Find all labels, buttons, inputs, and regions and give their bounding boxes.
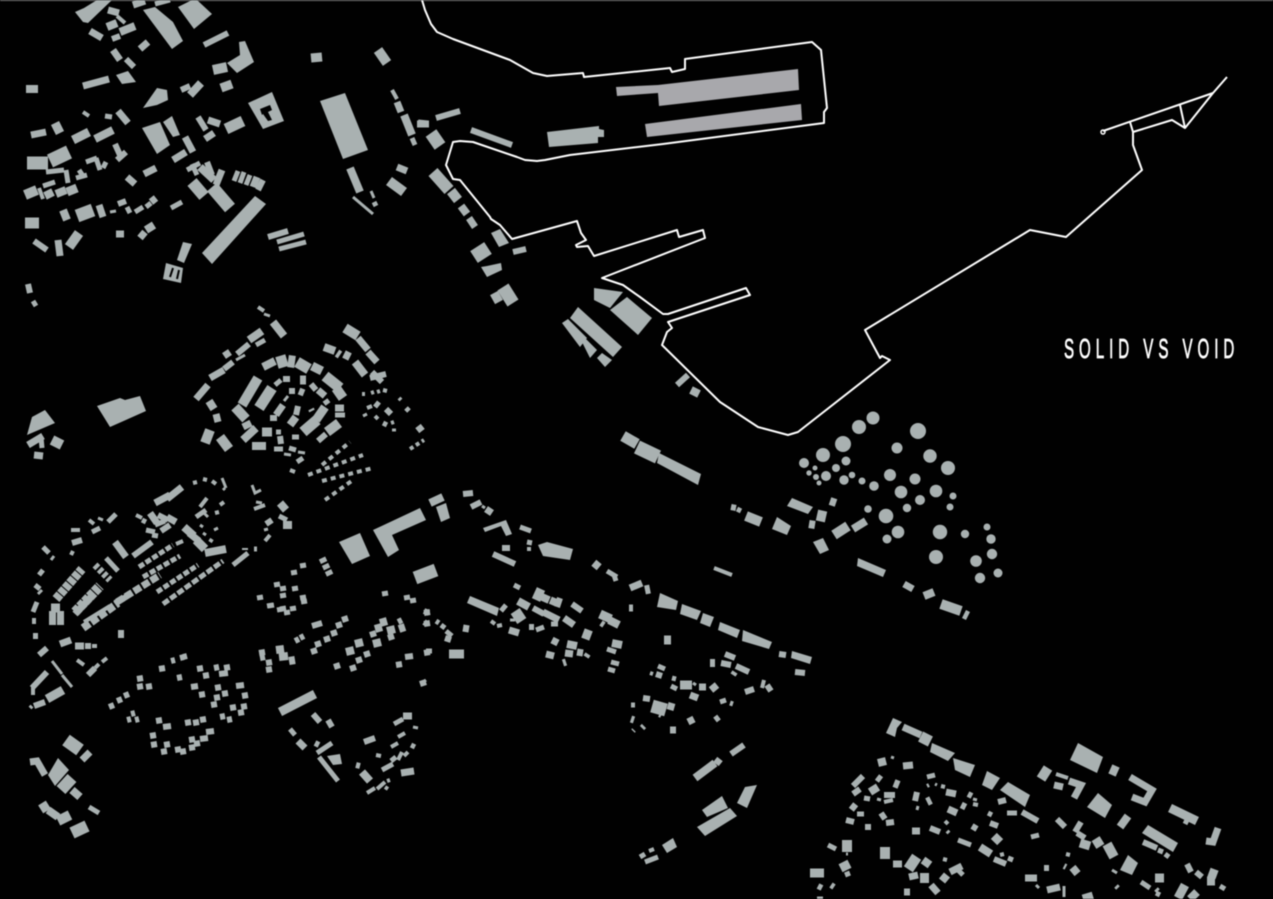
buildings: southern diagonal slabs [640, 745, 757, 862]
buildings: north-west town [25, 0, 429, 306]
buildings: hillside terraces [30, 478, 292, 708]
buildings: south-east district small houses [810, 757, 1013, 898]
buildings: tank farm sheds [731, 498, 968, 616]
coastline and harbour outline [422, 0, 1227, 435]
buildings: round estate [109, 656, 248, 752]
buildings: central clusters [30, 558, 430, 833]
buildings: storage tanks [799, 412, 1002, 583]
buildings: curved estate [196, 307, 424, 500]
title: solid vs void: SOLID VS VOID [1064, 333, 1239, 364]
coast: small loop at end of spit [1101, 130, 1105, 134]
buildings: waterfront sheds and quay [418, 69, 802, 485]
buildings: south-central scatter [631, 640, 771, 731]
buildings: west blocks [27, 396, 146, 456]
buildings: civic blocks and main street row [339, 493, 812, 683]
buildings: south-east district north edge [886, 718, 1225, 899]
